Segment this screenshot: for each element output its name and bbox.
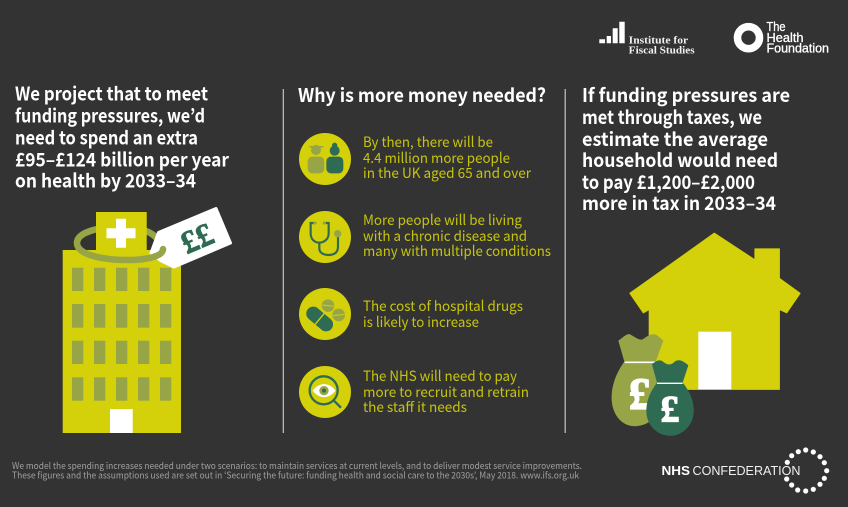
text: staff: The NHS will need to pay [363,366,518,386]
text: staff: the staff it needs [363,397,467,417]
text: chronic disease: with a chronic disease and [363,226,527,246]
logo: Institute for Fiscal Studies [599,22,695,56]
text: chronic disease: many with multiple conditions [363,241,551,261]
text: chronic disease: More people will be living [363,210,522,230]
heading: right column tax: household would need [582,146,778,173]
logo: The Health Foundation: The [766,20,786,34]
logo: The Health Foundation: Foundation [766,42,829,56]
heading: left column projection: funding pressures, we’d [15,102,205,128]
item: older people [299,132,532,185]
heading: right column tax: If funding pressures are [582,81,790,108]
heading: right column tax [582,81,790,216]
item: staff [299,366,529,418]
logo: Institute for Fiscal Studies: Fiscal Studies [629,45,695,56]
heading: right column tax: estimate the average [582,125,768,152]
text: chronic disease [363,210,551,261]
heading: left column projection: need to spend an extra [15,124,198,150]
text: 4.4 million more people [363,132,532,183]
logo: The Health Foundation [738,20,829,56]
text: hospital drugs: The cost of hospital drugs [363,296,523,316]
icon: pills [299,288,351,340]
icon: money bags: £ [661,389,679,430]
heading: why is more money needed: Why is more money needed? [298,81,546,108]
icon: money bags [612,334,694,436]
icon: money bags: £ [629,370,651,419]
logo: NHS Confederation [662,447,829,494]
footnote [12,459,582,482]
text: 4.4 million more people: By then, there will be [363,132,493,152]
heading: left column projection: £95–£124 billion per year [15,146,230,172]
icon: stethoscope [299,211,351,263]
text: 4.4 million more people: 4.4 million more people [363,148,510,168]
logo: NHS Confederation: NHS [662,463,690,478]
heading: left column projection: We project that to meet [15,80,208,106]
heading: right column tax: more in tax in 2033–34 [582,189,776,216]
icon: hospital with price tag: ££ [175,215,219,261]
heading: left column projection: on health by 2033–34 [15,166,196,194]
logo: NHS Confederation: CONFEDERATION [692,463,800,478]
heading: left column projection [15,80,230,194]
footnote: These figures and the assumptions used are set out in ‘Securing the future: funding health and social care to the 2030s’, May 2018. www.ifs.org.uk [12,468,579,482]
heading: right column tax: to pay £1,200–£2,000 [582,168,755,195]
text: staff: more to recruit and retrain [363,382,529,402]
icon: magnifying glass with eye [299,366,351,418]
item: chronic disease [299,210,551,263]
text: 4.4 million more people: in the UK aged 65 and over [363,163,532,183]
icon: two older people [299,133,351,185]
divider [283,89,284,433]
logo: Institute for Fiscal Studies: Institute for [629,36,689,46]
text: hospital drugs [363,296,523,332]
item: hospital drugs [299,288,523,340]
footnote: We model the spending increases needed under two scenarios: to maintain services at current levels, and to deliver modest service improvements. [12,459,582,472]
divider [565,89,566,433]
text: staff [363,366,529,417]
icon: house [630,233,800,389]
text: hospital drugs: is likely to increase [363,312,479,332]
logo: The Health Foundation: Health [766,31,804,45]
icon: hospital with price tag [63,208,231,433]
heading: right column tax: met through taxes, we [582,103,762,130]
